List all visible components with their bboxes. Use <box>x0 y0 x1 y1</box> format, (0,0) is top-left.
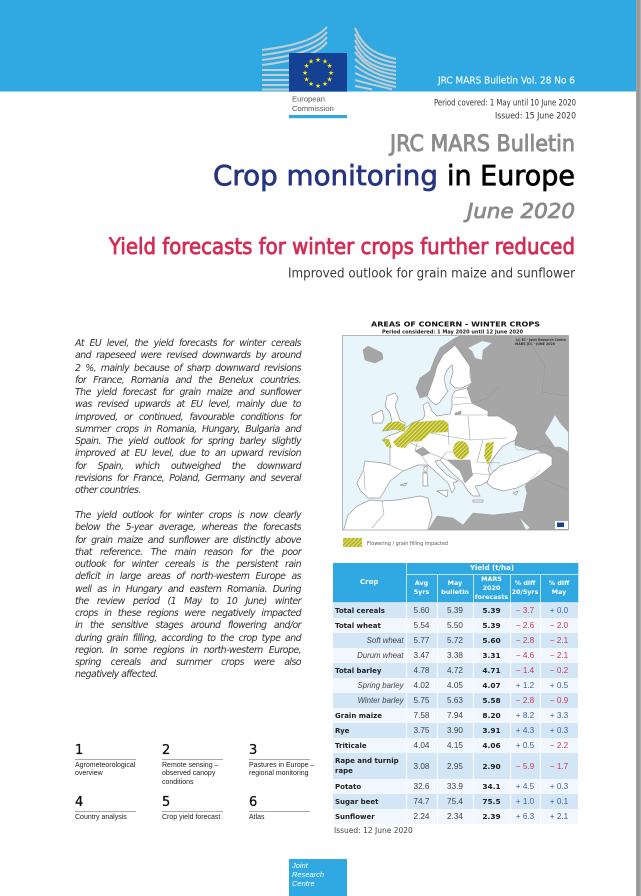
table: yield forecasts: % diff <box>549 579 569 587</box>
table: yield forecasts: 7.94 <box>447 711 463 720</box>
table: yield forecasts: + 4.3 <box>516 726 534 735</box>
table: yield forecasts: 8.20 <box>482 711 501 720</box>
chapter 1: overview <box>75 770 103 777</box>
table: yield forecasts: − 4.6 <box>516 651 534 660</box>
table: yield forecasts: 2.95 <box>447 762 463 771</box>
text: period covered: Issued: 15 June 2020 <box>495 112 576 122</box>
table: yield forecasts: 5.39 <box>482 606 501 615</box>
title: Crop monitoring in Europe: Crop monitoring <box>213 160 438 192</box>
chapter 6: 6 <box>249 795 257 810</box>
header band <box>0 0 636 92</box>
country borders <box>364 397 507 528</box>
table: yield forecasts: Winter barley <box>358 696 404 705</box>
table: yield forecasts: 3.90 <box>447 726 463 735</box>
table: yield forecasts: 5.77 <box>414 636 429 645</box>
table: yield forecasts: Potato <box>335 783 361 791</box>
text block: paragraph 2: for grain maize and sunflower are distinctly above <box>75 535 301 546</box>
map legend: Flowering / grain filling impacted <box>367 541 448 547</box>
table: yield forecasts: Rye <box>335 727 349 735</box>
table: yield forecasts: − 2.0 <box>550 621 568 630</box>
table: yield forecasts: + 1.2 <box>516 681 534 690</box>
table: yield forecasts: + 0.1 <box>550 797 568 806</box>
icon: EU flag: ★ <box>315 56 321 64</box>
text block: paragraph 2: region. In some regions in north-western Europe, <box>75 645 301 656</box>
non-EU land <box>363 335 570 532</box>
table: yield forecasts: − 5.9 <box>516 762 534 771</box>
table: yield forecasts: 33.9 <box>447 782 463 791</box>
footer box: Joint Research Centre: Centre <box>292 879 315 888</box>
impacted areas <box>382 420 494 465</box>
table: yield forecasts: 4.71 <box>482 666 501 675</box>
text block: paragraph 2 <box>75 510 302 680</box>
table: yield forecasts: − 2.8 <box>516 636 534 645</box>
table: yield forecasts: 75.4 <box>447 797 463 806</box>
chapter 3: regional monitoring <box>249 770 309 777</box>
table: yield forecasts: Crop <box>360 578 378 586</box>
text block: paragraph 2: the review period (1 May to 10 June) winter <box>75 596 301 607</box>
table: yield forecasts: + 3.3 <box>550 711 568 720</box>
text block: paragraph 1: for Spain, which outweighed the downward <box>75 461 301 472</box>
text block: paragraph 2: in the sensitive stages around flowering and/or <box>75 620 301 631</box>
icon: EU flag: ★ <box>308 58 314 66</box>
table: yield forecasts: 4.07 <box>482 681 501 690</box>
footer box: Joint Research Centre: Research <box>292 870 324 879</box>
table: yield forecasts: 20/5yrs <box>512 588 538 596</box>
table: yield forecasts: 2.24 <box>414 812 429 821</box>
headline: Yield forecasts for winter crops further reduced <box>108 235 575 260</box>
map credit: (c) EC - Joint Research Centre <box>516 338 566 342</box>
table: yield forecasts: Total barley <box>335 667 381 675</box>
chapter 4 <box>75 795 136 821</box>
map title: AREAS OF CONCERN - WINTER CROPS <box>371 320 540 328</box>
table: yield forecasts: 5yrs <box>414 588 429 596</box>
table: yield forecasts: Grain maize <box>335 712 382 720</box>
text block: paragraph 2: negatively affected. <box>75 669 158 680</box>
gray countries <box>415 411 473 483</box>
map credit <box>515 338 566 346</box>
text block: paragraph 2: deficit in large areas of north-western Europe as <box>75 571 301 582</box>
table: yield forecasts: − 2.2 <box>550 741 568 750</box>
chapter list <box>75 743 314 821</box>
text block: paragraph 1: Spain. The yield outlook for spring barley slightly <box>75 436 301 447</box>
table: yield forecasts: Sunflower <box>335 813 375 821</box>
table: yield forecasts: 5.60 <box>482 636 501 645</box>
chapter 2: Remote sensing – <box>162 762 218 769</box>
text block: paragraph 1: improved, or continued, favourable conditions for <box>75 412 301 423</box>
text block: paragraph 2: spring cereals and summer crops were also <box>75 657 301 668</box>
table: yield forecasts: + 0.0 <box>550 606 568 615</box>
icon: EU flag: ★ <box>315 82 321 90</box>
text: European Commission <box>292 94 334 113</box>
table: yield forecasts: − 2.8 <box>516 696 534 705</box>
chapter 1: Agrometeorological <box>75 762 135 769</box>
table: yield forecasts: − 3.7 <box>516 606 534 615</box>
table: yield forecasts: − 2.6 <box>516 621 534 630</box>
table: yield forecasts: 2.34 <box>447 812 463 821</box>
table: yield forecasts: Total wheat <box>335 622 381 630</box>
table: yield forecasts: 5.39 <box>447 606 463 615</box>
table: yield forecasts: 4.72 <box>447 666 463 675</box>
chapter 6 <box>249 795 310 821</box>
chapter 3: Pastures in Europe – <box>249 762 314 769</box>
table: yield forecasts: Spring barley <box>358 681 404 690</box>
table: yield forecasts: + 1.0 <box>516 797 534 806</box>
text: bulletin volume: JRC MARS Bulletin Vol. 28 No 6 <box>437 76 575 86</box>
text block: paragraph 1: At EU level, the yield forecasts for winter cereals <box>75 338 301 349</box>
table: yield forecasts: 4.04 <box>414 741 429 750</box>
table: yield forecasts: 3.31 <box>482 651 501 660</box>
map subtitle: Period considered: 1 May 2020 until 12 June 2020 <box>382 330 524 336</box>
table: yield forecasts: Rape and turnip rape <box>335 757 399 775</box>
table: yield forecasts: 5.58 <box>482 696 501 705</box>
footer box: Joint Research Centre: Joint <box>292 860 308 870</box>
table: yield forecasts: + 6.3 <box>516 812 534 821</box>
chapter 5: 5 <box>162 795 170 810</box>
table: yield forecasts: − 1.4 <box>516 666 534 675</box>
chapter 4: 4 <box>75 795 83 810</box>
page edge shadow <box>636 0 641 896</box>
table: yield forecasts: 2020 <box>483 584 500 592</box>
text block: paragraph 2: The yield outlook for winter crops is now clearly <box>75 510 301 521</box>
table: yield forecasts: + 0.5 <box>516 741 534 750</box>
table: yield forecasts: − 2.1 <box>550 636 568 645</box>
table: yield forecasts: + 4.5 <box>516 782 534 791</box>
chapter 2: conditions <box>162 779 194 786</box>
table: yield forecasts: 5.54 <box>414 621 429 630</box>
EU and neighbouring land <box>343 345 552 532</box>
table: yield forecasts: − 0.9 <box>550 696 568 705</box>
title: Crop monitoring in Europe: in Europe <box>447 160 575 192</box>
table: yield forecasts: 34.1 <box>482 782 501 791</box>
text: period covered <box>434 98 576 122</box>
table: yield forecasts: 5.72 <box>447 636 463 645</box>
table: yield forecasts: 3.75 <box>414 726 429 735</box>
logo underline <box>289 115 347 118</box>
text block: paragraph 2: outlook for winter cereals is the persistent rain <box>75 559 301 570</box>
table: yield forecasts: MARS <box>481 574 502 582</box>
chapter 4: Country analysis <box>75 814 127 821</box>
text block: paragraph 1 <box>74 338 302 496</box>
text: period covered: Period covered: 1 May until 10 June 2020 <box>434 98 576 108</box>
icon: EU flag: ★ <box>308 80 314 88</box>
logo: European Commission <box>262 26 576 122</box>
table: yield forecasts: + 0.3 <box>550 726 568 735</box>
chapter 1: 1 <box>75 743 83 758</box>
icon: EU flag: ★ <box>328 69 334 77</box>
gray borders in the east <box>472 346 568 490</box>
chapter 5 <box>162 795 223 821</box>
table: yield forecasts: 4.05 <box>447 681 463 690</box>
table: yield forecasts: 5.63 <box>447 696 463 705</box>
text: European Commission: Commission <box>292 104 334 113</box>
text: European Commission: European <box>292 94 325 104</box>
text block: paragraph 1: The yield forecast for grain maize and sunflower <box>75 387 301 398</box>
icon: Berlaymont building <box>262 27 396 90</box>
icon: EU flag <box>289 53 347 92</box>
map legend <box>343 538 448 547</box>
table: yield forecasts: − 0.2 <box>550 666 568 675</box>
text block: paragraph 2: during grain filling, according to the crop type and <box>75 633 301 644</box>
text block: paragraph 1: was revised upwards at EU level, mainly due to <box>75 399 301 410</box>
icon: EU flag: ★ <box>322 80 328 88</box>
icon: EU flag: ★ <box>327 76 333 84</box>
date: June 2020: June 2020 <box>463 199 575 223</box>
table: yield forecasts: 3.91 <box>482 726 501 735</box>
chapter 1 <box>75 743 136 777</box>
table: yield forecasts: − 2.1 <box>550 651 568 660</box>
seas inside non-EU land <box>468 341 569 530</box>
table: yield forecasts: + 8.2 <box>516 711 534 720</box>
table: yield forecasts: 4.02 <box>414 681 429 690</box>
chapter 6: Atlas <box>249 814 265 821</box>
table: yield forecasts: 2.39 <box>482 812 501 821</box>
table: yield forecasts: Durum wheat <box>357 651 404 660</box>
heading: JRC MARS Bulletin: JRC MARS Bulletin <box>388 132 575 157</box>
subheadline: Improved outlook for grain maize and sunflower <box>288 266 576 282</box>
table: yield forecasts: + 0.3 <box>550 782 568 791</box>
table: yield forecasts: + 2.1 <box>550 812 568 821</box>
map body <box>342 335 570 532</box>
icon: EU flag: ★ <box>304 76 310 84</box>
table: yield forecasts: 32.6 <box>414 782 429 791</box>
text block: paragraph 1: and rapeseed were revised downwards by around <box>75 350 301 361</box>
icon: EU flag: ★ <box>304 62 310 70</box>
text block: paragraph 1: summer crops in Romania, Hungary, Bulgaria and <box>75 424 301 435</box>
table: yield forecasts: Total cereals <box>335 607 385 615</box>
table: yield forecasts: 2.90 <box>482 762 501 771</box>
map: areas of concern winter crops <box>342 320 569 547</box>
table: yield forecasts: Yield (t/ha) <box>470 564 514 572</box>
table: yield forecasts: Sugar beet <box>335 798 379 806</box>
table: yield forecasts: Triticale <box>335 742 367 750</box>
title: Crop monitoring in Europe <box>213 160 575 192</box>
chapter 3 <box>249 743 314 777</box>
table: yield forecasts: 5.75 <box>414 696 429 705</box>
chapter 2: observed canopy <box>162 770 215 777</box>
table: yield forecasts: May <box>552 588 566 596</box>
text block: paragraph 1: 2 %, mainly because of sharp downward revisions <box>75 363 301 374</box>
table: yield forecasts: 3.38 <box>447 651 463 660</box>
icon: map EU logo <box>555 521 568 529</box>
text block: paragraph 1: for France, Romania and the Benelux countries. <box>75 375 301 386</box>
chapter 5: Crop yield forecast <box>162 814 220 821</box>
table: yield forecasts: 4.15 <box>447 741 463 750</box>
table: yield forecasts: 5.50 <box>447 621 463 630</box>
icon: EU flag: ★ <box>302 69 308 77</box>
text block: paragraph 2: crops in these regions were negatively impacted <box>75 608 301 619</box>
table: yield forecasts: 5.39 <box>482 621 501 630</box>
title block <box>108 132 576 282</box>
table note: Issued: 12 June 2020 <box>334 826 413 834</box>
table: yield forecasts: − 1.7 <box>550 762 568 771</box>
table: yield forecasts: 5.60 <box>414 606 429 615</box>
chapter 2 <box>162 743 223 786</box>
map credit: MARS JCC - JUNE 2020 <box>515 342 556 346</box>
table: yield forecasts: + 0.5 <box>550 681 568 690</box>
text block: paragraph 1: other countries. <box>75 485 141 496</box>
table: yield forecasts: 3.08 <box>414 762 429 771</box>
text block: paragraph 2: that reference. The main reason for the poor <box>75 547 301 558</box>
table: yield forecasts: 4.78 <box>414 666 429 675</box>
table: yield forecasts: bulletin <box>441 588 469 596</box>
table: yield forecasts: 4.06 <box>482 741 501 750</box>
table: yield forecasts: Avg <box>415 579 428 587</box>
table: yield forecasts: % diff <box>515 579 535 587</box>
table: yield forecasts: 75.5 <box>482 797 501 806</box>
table: yield forecasts: Soft wheat <box>367 636 404 645</box>
icon: EU flag: ★ <box>322 58 328 66</box>
icon: EU flag: ★ <box>327 62 333 70</box>
table: yield forecasts <box>333 563 579 824</box>
table: yield forecasts: forecasts <box>475 593 508 601</box>
table: yield forecasts: 74.7 <box>414 797 429 806</box>
text block: paragraph 1: revisions for France, Poland, Germany and several <box>75 473 301 484</box>
table: yield forecasts: 3.47 <box>414 651 429 660</box>
text block: paragraph 2: well as in Hungary and eastern Romania. During <box>75 584 301 595</box>
text block: paragraph 1: improved at EU level, due to an upward revision <box>75 448 301 459</box>
chapter 2: 2 <box>162 743 170 758</box>
table: yield forecasts: May <box>448 579 462 587</box>
table: yield forecasts: 7.58 <box>414 711 429 720</box>
text block: paragraph 2: below the 5-year average, whereas the forecasts <box>75 522 301 533</box>
chapter 3: 3 <box>249 743 257 758</box>
footer box: Joint Research Centre <box>289 859 347 896</box>
